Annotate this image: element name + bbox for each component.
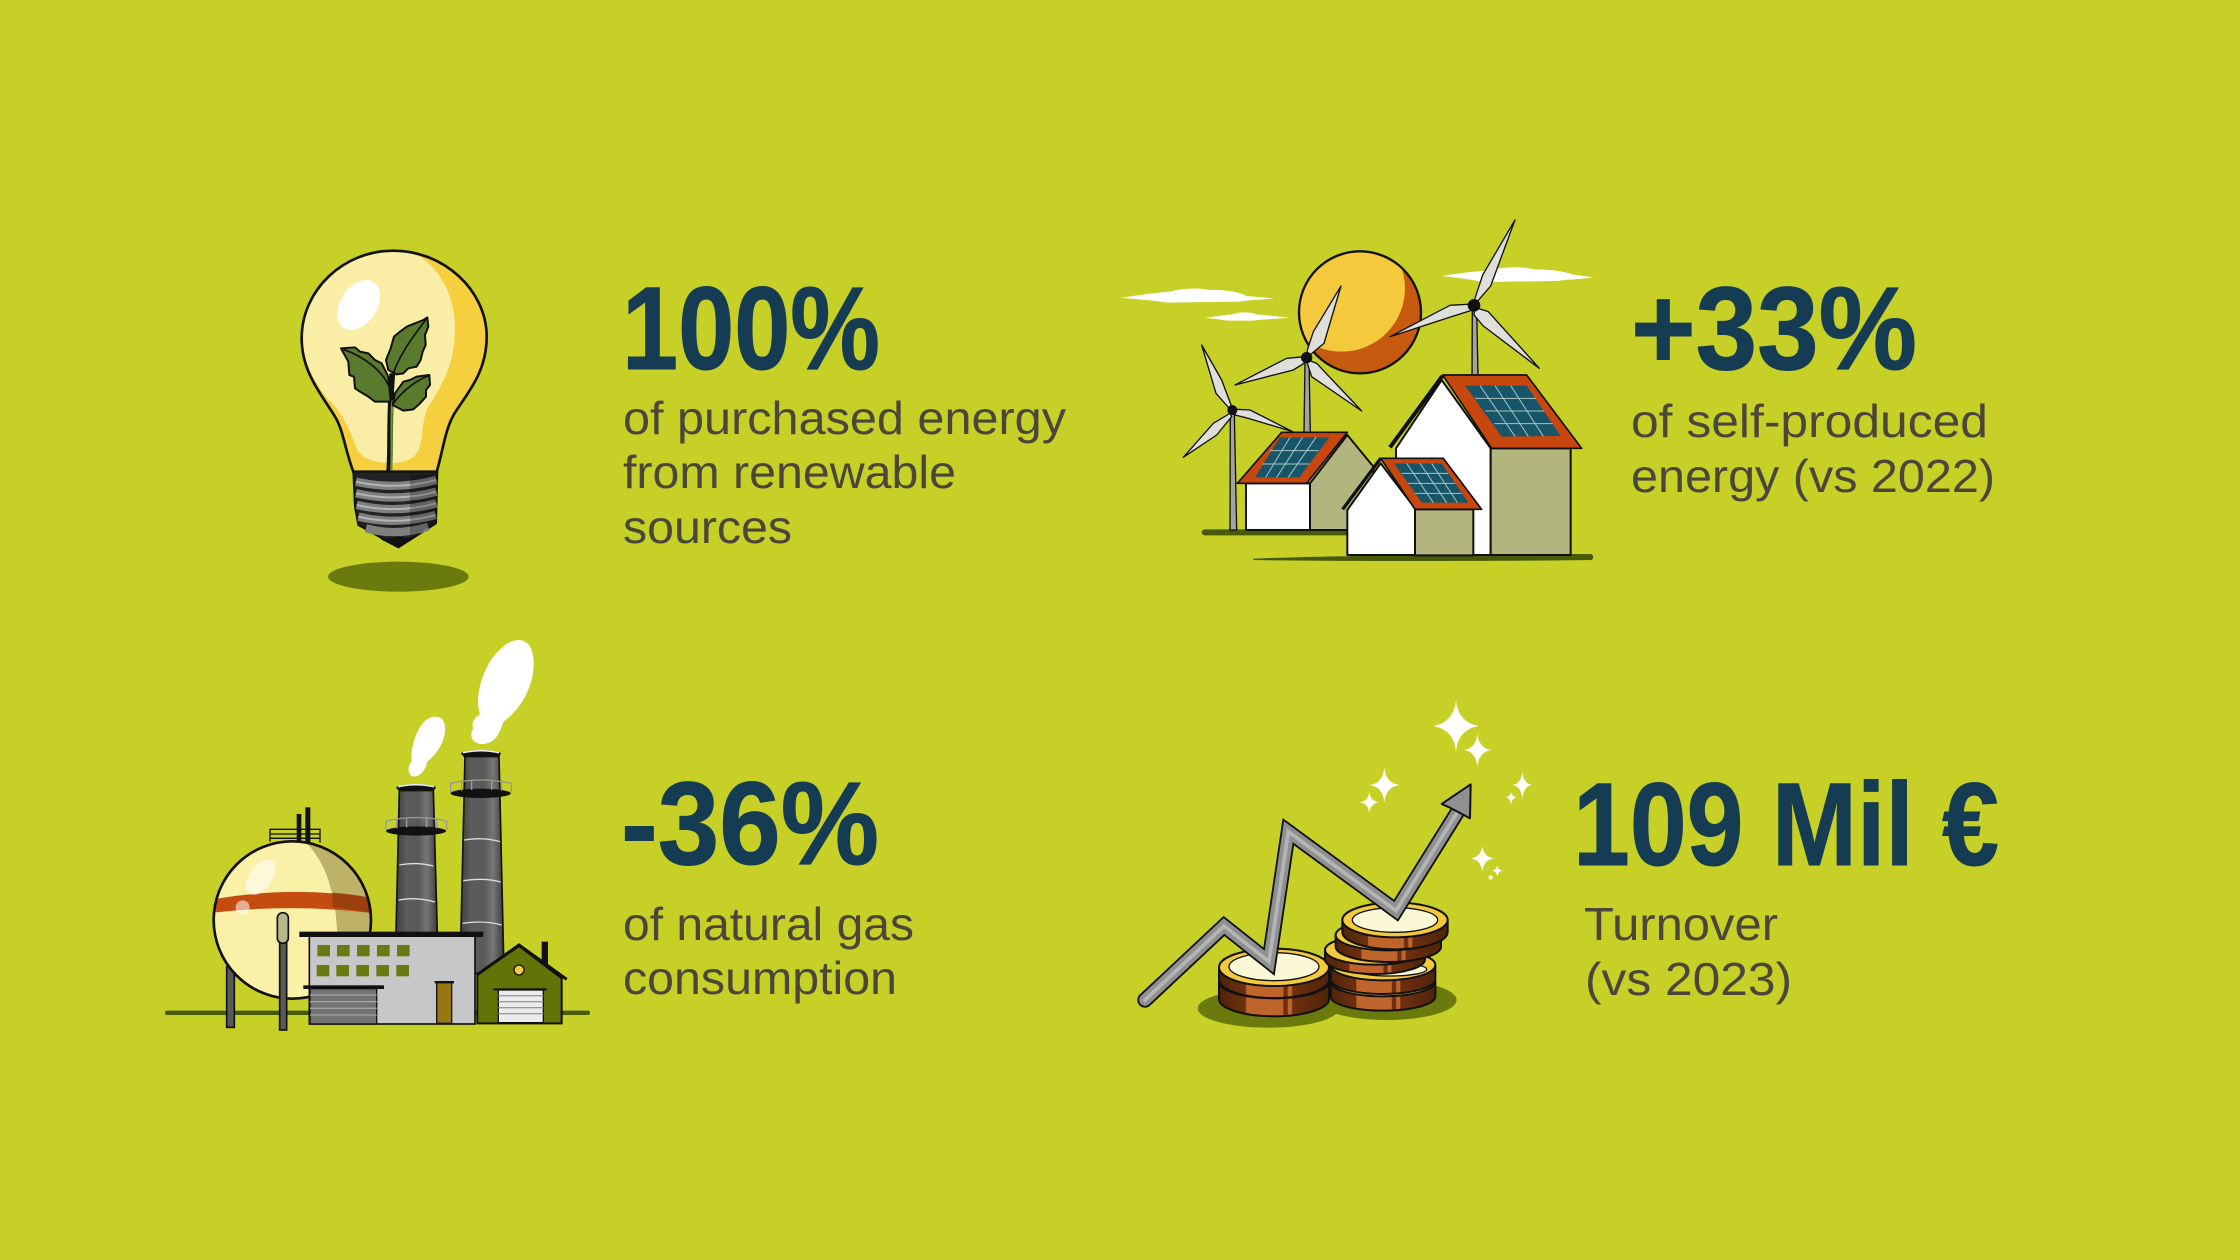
bulb shadow [328, 562, 469, 592]
sun [1298, 250, 1422, 374]
icon: coins with rising arrow [1145, 700, 1532, 1028]
icon: gas sphere and factory [165, 640, 590, 1030]
smoke [409, 640, 534, 777]
description: of purchased energy [623, 392, 1066, 444]
ground strips [1202, 529, 1593, 561]
infographic canvas [165, 219, 1998, 1031]
heading: -36% [621, 758, 879, 890]
right coin stack [1325, 903, 1448, 1011]
stat: 100% renewable energy [622, 263, 1066, 553]
heading: 109 Mil € [1573, 759, 1999, 891]
stat: -36% natural gas [621, 758, 914, 1004]
description [1584, 898, 1792, 1005]
description: Turnover [1584, 898, 1778, 950]
description: sources [623, 501, 792, 553]
heading: 100% [622, 263, 880, 395]
ground line [165, 1011, 590, 1015]
plant [341, 317, 430, 481]
clouds [1121, 267, 1594, 321]
sparkles [1360, 700, 1532, 879]
description [623, 392, 1066, 553]
heading: +33% [1631, 263, 1917, 395]
description [623, 898, 914, 1004]
factory building [299, 932, 483, 1024]
description: of natural gas [623, 898, 914, 950]
small green house [477, 942, 567, 1023]
bulb screw base [353, 472, 437, 547]
description: (vs 2023) [1585, 953, 1792, 1005]
gas sphere [213, 807, 377, 1030]
small front house [1343, 458, 1482, 555]
description [1631, 395, 1995, 502]
wind turbines [1183, 220, 1539, 530]
left house [1237, 432, 1373, 530]
description: of self-produced [1631, 395, 1988, 447]
description: from renewable [623, 446, 956, 498]
icon: houses with solar panels and wind turbines [1121, 220, 1594, 561]
icon: light bulb with plant [302, 248, 487, 592]
stat: +33% self-produced energy [1631, 263, 1995, 502]
coin shadows [1198, 980, 1457, 1028]
rising arrow [1145, 784, 1471, 1000]
stat: 109 Mil euro turnover [1573, 759, 1999, 1005]
bulb glass [302, 248, 487, 472]
description: energy (vs 2022) [1631, 450, 1995, 502]
left coin stack [1219, 949, 1329, 1016]
large right house [1390, 375, 1582, 555]
description: consumption [623, 952, 897, 1004]
chimneys [386, 750, 511, 973]
